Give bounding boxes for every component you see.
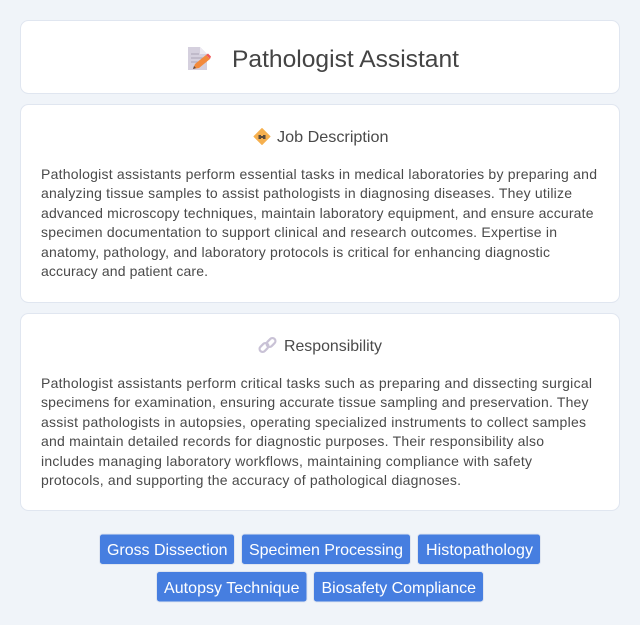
text block: responsibility: Pathologist assistants perform critical tasks such as preparing and dissecting surgical	[41, 375, 592, 391]
text block: job description: analyzing tissue samples to assist pathologists in diagnosing diseases. They utilize	[41, 185, 572, 201]
icon: chain link	[258, 337, 277, 353]
tag: gross dissection	[100, 534, 234, 564]
tag: histopathology	[418, 534, 540, 564]
tag: biosafety compliance: Biosafety Compliance	[322, 580, 476, 597]
text block: responsibility: specimens for examination, ensuring accurate tissue sampling and preservation. They	[41, 394, 588, 410]
tag: autopsy technique: Autopsy Technique	[164, 580, 300, 597]
heading: responsibility: Responsibility	[284, 338, 382, 355]
text block: responsibility: includes managing laboratory workflows, maintaining compliance with safety	[41, 453, 532, 469]
text block: job description: specimen documentation to support clinical and research outcomes. Expertise in	[41, 224, 557, 240]
tag: gross dissection: Gross Dissection	[107, 542, 228, 559]
text block: job description: accuracy and patient care.	[41, 263, 208, 279]
text block: job description: advanced microscopy techniques, maintain laboratory equipment, and ensure accurate	[41, 205, 594, 221]
text block: responsibility: protocols, and supporting the accuracy of pathological diagnoses.	[41, 472, 461, 488]
tag: histopathology: Histopathology	[426, 542, 533, 559]
panel: job description	[20, 104, 620, 302]
icon: diamond sign	[254, 128, 270, 144]
panel: responsibility	[20, 314, 620, 510]
text block: job description: anatomy, pathology, and laboratory protocols is critical for enhancing diagnostic	[41, 244, 550, 260]
tag: biosafety compliance	[314, 572, 484, 602]
tag: specimen processing	[242, 534, 410, 564]
title: Pathologist Assistant	[232, 46, 459, 73]
panel: header	[20, 20, 620, 94]
tag: autopsy technique	[156, 572, 307, 602]
text block: responsibility: assist pathologists in autopsies, operating specialized instruments to collect samples	[41, 414, 586, 430]
icon: document with pencil	[188, 47, 211, 70]
heading: job description: Job Description	[277, 129, 388, 146]
tag: specimen processing: Specimen Processing	[249, 542, 403, 559]
tags	[100, 534, 540, 602]
text block: responsibility: and maintain detailed records for diagnostic purposes. Their responsibility also	[41, 433, 544, 449]
text block: job description	[41, 166, 597, 279]
text block: responsibility	[41, 375, 592, 488]
text block: job description: Pathologist assistants perform essential tasks in medical laboratories by preparing and	[41, 166, 597, 182]
